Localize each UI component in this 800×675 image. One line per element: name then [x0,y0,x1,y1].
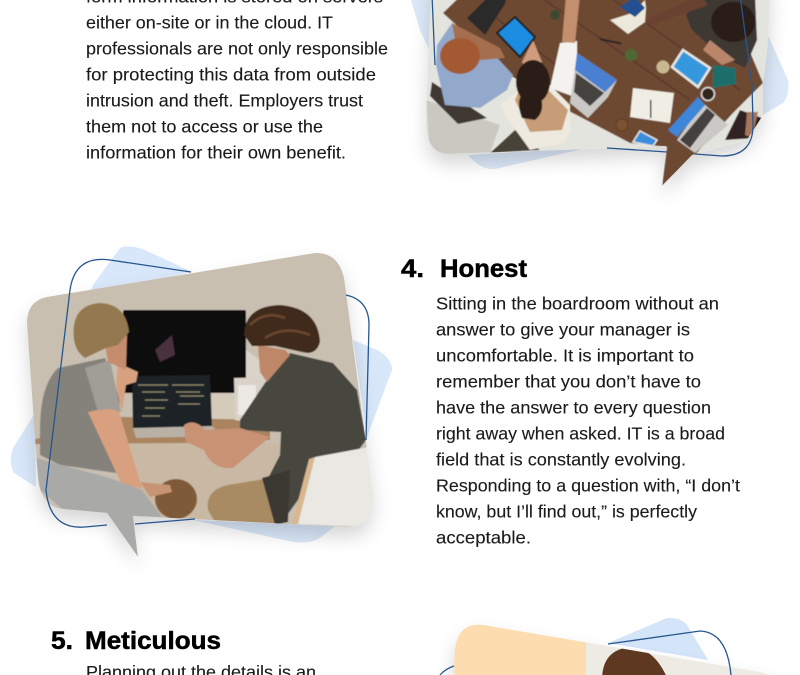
person top right [686,0,757,68]
right laptop [233,376,246,422]
text block: item 3 body: professionals are not only responsible [86,38,388,58]
person left: shirt [40,358,120,474]
table [443,0,763,186]
main laptop [132,375,212,428]
text block: item 4 body: right away when asked. IT is a broad [436,423,725,443]
text block: item 4 body: remember that you don’t have to [436,371,701,391]
open notebook [630,88,674,123]
text block: item 4 body: uncomfortable. It is important to [436,345,694,365]
monitor stand [212,393,235,419]
text block: item 4 body: field that is constantly evolving. [436,449,686,469]
blue outline of item 5 bubble [440,631,731,675]
heading: 5. Meticulous: 5. [51,627,73,655]
photo speech bubble [420,0,780,190]
text block: item 4 body: acceptable. [436,527,531,547]
photo speech bubble [20,245,380,565]
person bottom right [725,110,762,140]
text block: item 3 body [86,0,388,162]
decorative blue blob behind team photo [408,0,788,169]
floor [426,100,500,155]
laptop [570,53,617,118]
image: two developers at a laptop [11,245,392,565]
heading: 5. Meticulous: Meticulous [85,627,221,655]
person left: face [105,335,127,370]
text block: item 3 body: them not to access or use the [86,116,323,136]
person: blue shirt [436,23,513,108]
person left: hair [74,303,129,358]
text block: item 4 body: answer to give your manager is [436,319,690,339]
text block: item 4 body [436,293,740,547]
knee [155,479,197,519]
monitor [123,310,246,393]
person right: hair [244,305,320,353]
text block: item 3 body: either on-site or in the cloud. IT [86,12,333,32]
image: item 5 photo, cropped by the page edge [440,618,790,675]
text block: item 4 body: Responding to a question with, “I don’t [436,475,740,495]
person right: arm [184,422,270,468]
blue outline of team bubble [432,0,753,156]
text block: item 4 body: know, but I’ll find out,” is perfectly [436,501,697,521]
notebook top [610,0,646,34]
decorative blue blob behind item 5 photo [608,618,708,660]
heading: 4. Honest: Honest [440,255,528,283]
person left: arm [88,409,142,488]
photo speech bubble [447,624,768,675]
desk [32,417,270,444]
decorative blue blob behind developer photo [11,246,392,542]
person right: body [240,353,366,525]
dark notebook [467,0,507,35]
laptop lower right [677,103,728,153]
blue outline of developer bubble [46,259,369,527]
heading: 4. Honest [401,255,528,283]
tablet left [497,17,535,57]
text block: item 3 body: information for their own benefit. [86,142,346,162]
phone [633,131,657,146]
gray chair left [36,458,162,557]
shorts [208,478,277,525]
tablet right [672,50,710,87]
person: woman [500,85,570,150]
text block: item 3 body: intrusion and theft. Employers trust [86,90,363,110]
white chair [292,447,374,527]
chair [430,82,487,124]
text block: item 4 body: Sitting in the boardroom without an [436,293,719,313]
text block: item 4 body: have the answer to every question [436,397,711,417]
text block: item 3 body: for protecting this data from outside [86,64,376,84]
person right: face [258,345,290,382]
heading: 4. Honest: 4. [401,255,424,283]
image: team meeting around a table [408,0,788,190]
